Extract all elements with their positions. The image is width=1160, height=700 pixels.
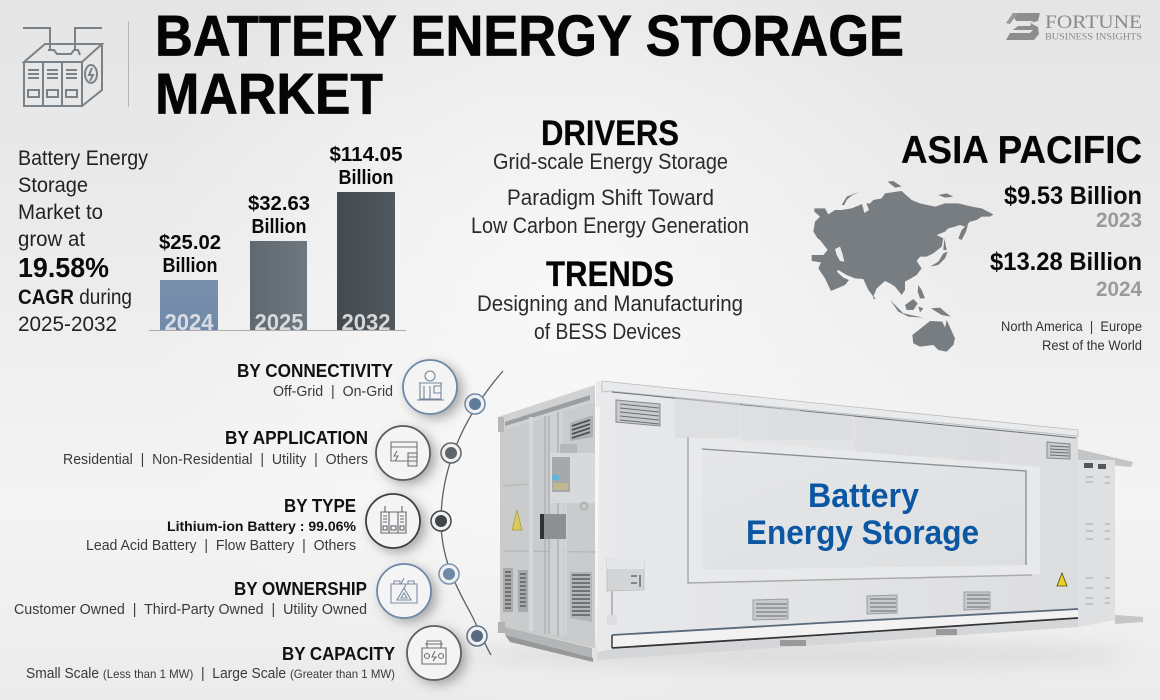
base rail <box>597 609 1078 660</box>
title <box>155 4 904 126</box>
bar 2032: Billion <box>338 167 394 189</box>
panel: drivers: Grid-scale Energy Storage <box>493 149 728 174</box>
divider <box>128 21 129 107</box>
control box <box>550 444 595 510</box>
bar 2024 <box>159 232 221 335</box>
annex: right side cabinet <box>1078 449 1143 627</box>
upper vent <box>570 415 593 441</box>
corner post <box>596 381 610 407</box>
map: Asia Pacific <box>812 181 993 352</box>
segment arc with nodes <box>431 371 503 655</box>
panel: drivers: DRIVERS <box>541 114 679 153</box>
segment: by type: Lithium-ion Battery : 99.06% <box>167 518 357 534</box>
icon: battery storage cabinet <box>23 28 102 106</box>
panel: label board <box>688 437 1040 583</box>
text block: CAGR statement: Battery Energy <box>18 146 148 170</box>
side: door face <box>498 385 596 662</box>
text block: CAGR statement: Market to <box>18 200 103 224</box>
text block: CAGR statement: CAGR during <box>18 285 132 309</box>
node 2 <box>441 443 461 463</box>
segment: by capacity <box>26 626 466 684</box>
segment: by type: Lead Acid Battery | Flow Battery | Others <box>86 538 356 554</box>
roof rail <box>498 385 595 432</box>
segment: by capacity: Small Scale (Less than 1 MW) | Large Scale (Greater than 1 MW) <box>26 666 395 682</box>
segment: by connectivity: BY CONNECTIVITY <box>237 361 393 381</box>
container shadow <box>470 641 1130 669</box>
panel: asia pacific figures: Rest of the World <box>1042 337 1142 353</box>
warning sign <box>512 510 522 530</box>
bar 2025: $32.63 <box>248 193 310 215</box>
segment: by application: BY APPLICATION <box>225 428 368 448</box>
battery storage container <box>498 381 1143 662</box>
logo: Fortune Business Insights: FORTUNE <box>1045 12 1142 33</box>
segment: by ownership: Customer Owned | Third-Party Owned | Utility Owned <box>14 602 367 618</box>
lower vents <box>503 568 513 612</box>
latch <box>541 514 566 539</box>
top panels <box>675 398 1001 460</box>
bar chart: market size <box>149 144 406 335</box>
segment: by ownership <box>14 564 436 622</box>
node 1 <box>465 394 485 414</box>
bar 2025: 2025 <box>254 309 304 335</box>
text block: CAGR statement <box>18 146 148 336</box>
panel: asia pacific figures: $9.53 Billion <box>1004 182 1142 210</box>
panel: asia pacific figures: $13.28 Billion <box>990 248 1142 276</box>
node 4 <box>439 564 459 584</box>
node 5 <box>467 626 487 646</box>
segment: by type <box>86 494 425 554</box>
text block: CAGR statement: Storage <box>18 173 88 197</box>
bar 2025 <box>248 193 310 335</box>
segment: by connectivity <box>237 360 462 418</box>
title: BATTERY ENERGY STORAGE <box>155 4 904 68</box>
text block: CAGR statement: 19.58% <box>18 252 109 283</box>
small control unit <box>607 559 644 625</box>
panel: drivers: Low Carbon Energy Generation <box>471 213 749 238</box>
plinth <box>505 627 592 658</box>
panel: asia pacific figures: North America | Europe <box>1001 318 1142 334</box>
panel: asia pacific figures: 2023 <box>1096 208 1142 232</box>
container label: Energy Storage <box>746 514 979 552</box>
segment: by application: Residential | Non-Residential | Utility | Others <box>63 452 368 468</box>
roof rail long <box>602 381 1078 436</box>
segment: by ownership: BY OWNERSHIP <box>234 579 367 599</box>
icon: battery cabinet <box>381 506 406 533</box>
container label: Battery <box>808 477 919 515</box>
panel: asia pacific figures: ASIA PACIFIC <box>901 129 1142 172</box>
bar 2024: $25.02 <box>159 232 221 254</box>
panel: trends: of BESS Devices <box>534 319 681 344</box>
node 3 <box>431 511 451 531</box>
bar 2024: Billion <box>162 255 218 277</box>
text block: CAGR statement: grow at <box>18 227 85 251</box>
segment: by application <box>63 426 435 484</box>
warning sign <box>1057 573 1067 586</box>
segment: by capacity: BY CAPACITY <box>282 644 395 664</box>
bar 2024: 2024 <box>164 309 214 335</box>
container label <box>746 477 979 552</box>
panel: drivers: Paradigm Shift Toward <box>507 185 714 210</box>
segment: by connectivity: Off-Grid | On-Grid <box>273 384 393 400</box>
bar 2025: Billion <box>252 216 306 238</box>
panel: drivers <box>471 114 749 238</box>
icon: application screen and battery <box>391 442 417 466</box>
icon: recycling battery <box>391 578 417 603</box>
panel: trends: TRENDS <box>546 255 674 294</box>
bar 2032: $114.05 <box>330 144 402 166</box>
door seams <box>503 484 596 552</box>
panel: trends: Designing and Manufacturing <box>477 291 743 316</box>
icon: grid building <box>417 371 444 400</box>
long side face <box>597 382 1078 660</box>
icon: battery <box>422 641 446 664</box>
logo: Fortune Business Insights <box>1006 12 1142 42</box>
panel: asia pacific figures: 2024 <box>1096 277 1142 301</box>
logo: Fortune Business Insights: BUSINESS INSIGHTS <box>1045 32 1142 42</box>
text block: CAGR statement: 2025-2032 <box>18 312 117 336</box>
segment: by type: BY TYPE <box>284 496 356 516</box>
vents <box>616 400 1070 620</box>
bar 2032 <box>330 144 402 335</box>
bar 2032: 2032 <box>342 309 390 335</box>
panel: trends <box>477 255 743 344</box>
panel: asia pacific figures <box>901 129 1142 353</box>
title: MARKET <box>155 62 383 126</box>
